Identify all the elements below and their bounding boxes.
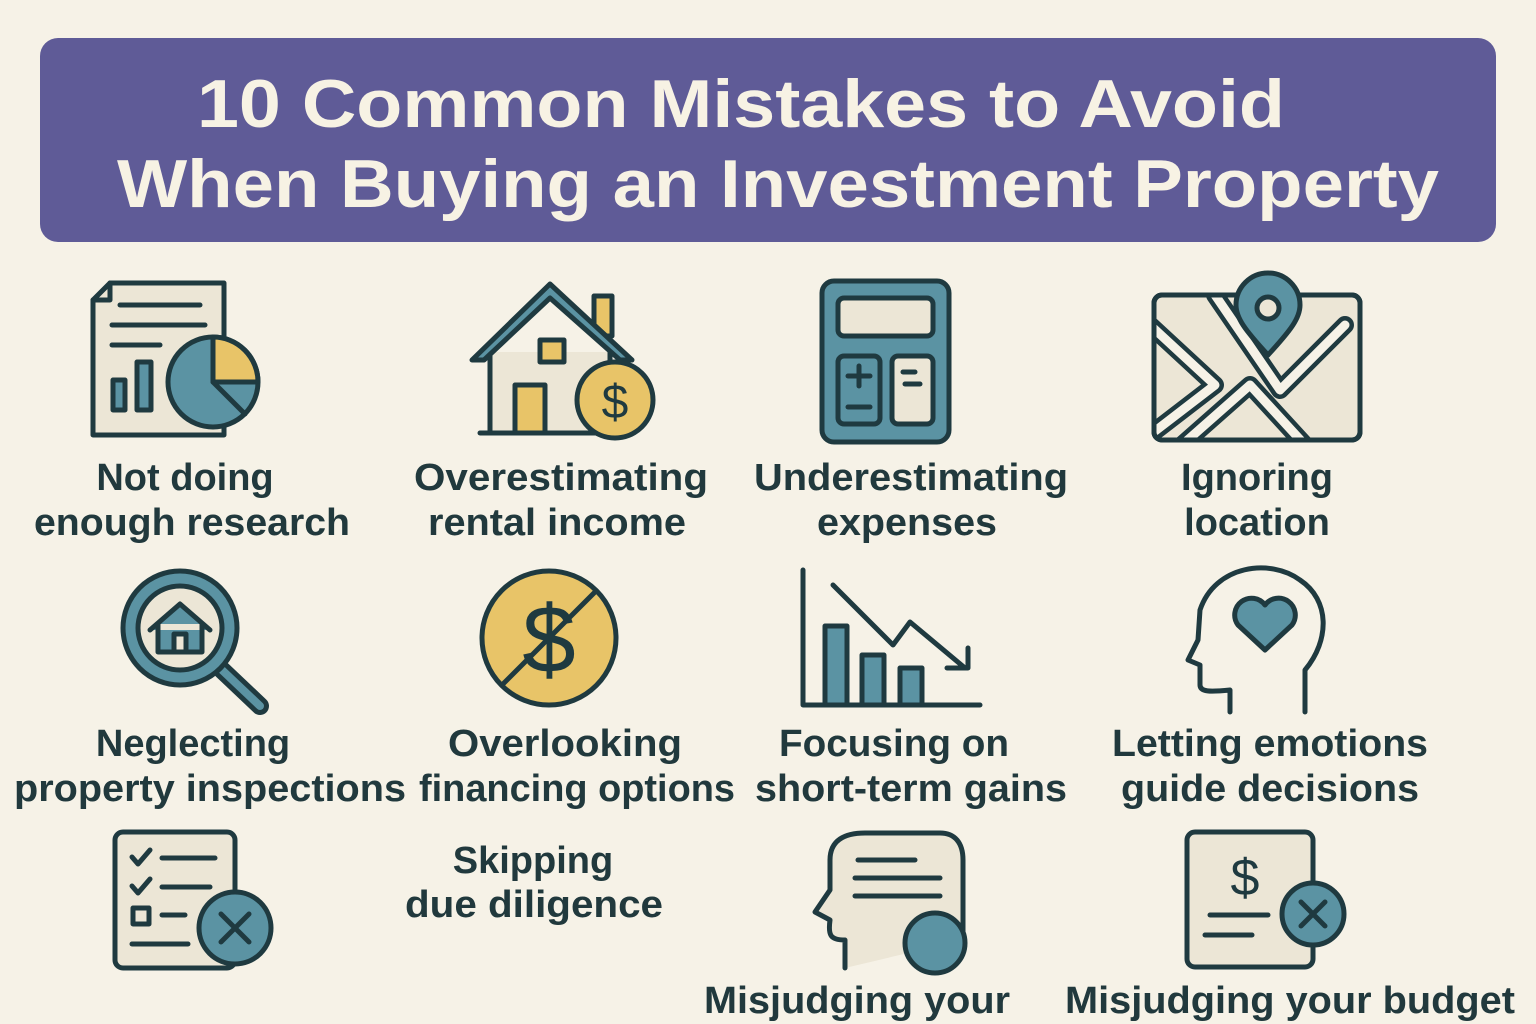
icon: budget document with x: $ [1231,849,1260,907]
label: overlooking financing options [419,723,735,810]
label: neglecting property inspections [14,723,406,810]
label: misjudging your budget: Misjudging your budget [1065,980,1515,1022]
label: ignoring location [1181,457,1333,544]
label: focusing on short-term gains: short-term gains [755,768,1067,810]
label: misjudging your: Misjudging your [704,980,1010,1022]
icon: house with coin: $ [602,376,628,429]
icon: calculator [822,281,949,442]
label: skipping due diligence: Skipping [453,840,613,882]
icon: budget document with x [1187,832,1344,967]
label: overlooking financing options: Overlooking [448,723,682,765]
label: skipping due diligence: due diligence [405,884,663,926]
label: not doing enough research: Not doing [96,457,274,499]
label: underestimating expenses: Underestimating [754,457,1068,499]
label: letting emotions guide decisions: Letting emotions [1112,723,1428,765]
icon: declining bar chart [803,570,980,705]
label: ignoring location: location [1184,502,1330,544]
label: overestimating rental income [414,457,708,544]
title banner: When Buying an Investment Property [117,146,1439,222]
label: not doing enough research [34,457,350,544]
label: focusing on short-term gains [755,723,1067,810]
icon: head with document [815,833,965,973]
icon: map with pin [1150,273,1360,445]
label: overestimating rental income: rental income [428,502,686,544]
label: letting emotions guide decisions [1112,723,1428,810]
label: skipping due diligence [405,840,663,926]
title banner [40,38,1496,242]
icon: magnifier with house [123,571,260,706]
label: overestimating rental income: Overestimating [414,457,708,499]
label: underestimating expenses [754,457,1068,544]
label: letting emotions guide decisions: guide decisions [1121,768,1419,810]
label: overlooking financing options: ﬁnancing options [419,768,735,810]
icon: crossed-out dollar: $ [522,586,576,693]
icon: crossed-out dollar [482,571,616,705]
label: neglecting property inspections: Neglecting [96,723,290,765]
icon: research document with pie chart [93,283,258,435]
icon: house with coin [472,284,653,438]
label: focusing on short-term gains: Focusing on [779,723,1009,765]
title banner: 10 Common Mistakes to Avoid [197,66,1285,142]
label: neglecting property inspections: property inspections [14,768,406,810]
label: not doing enough research: enough research [34,502,350,544]
label: ignoring location: Ignoring [1181,457,1333,499]
icon: checklist with x [115,832,271,968]
icon: head with heart [1188,568,1323,712]
label: underestimating expenses: expenses [817,502,997,544]
